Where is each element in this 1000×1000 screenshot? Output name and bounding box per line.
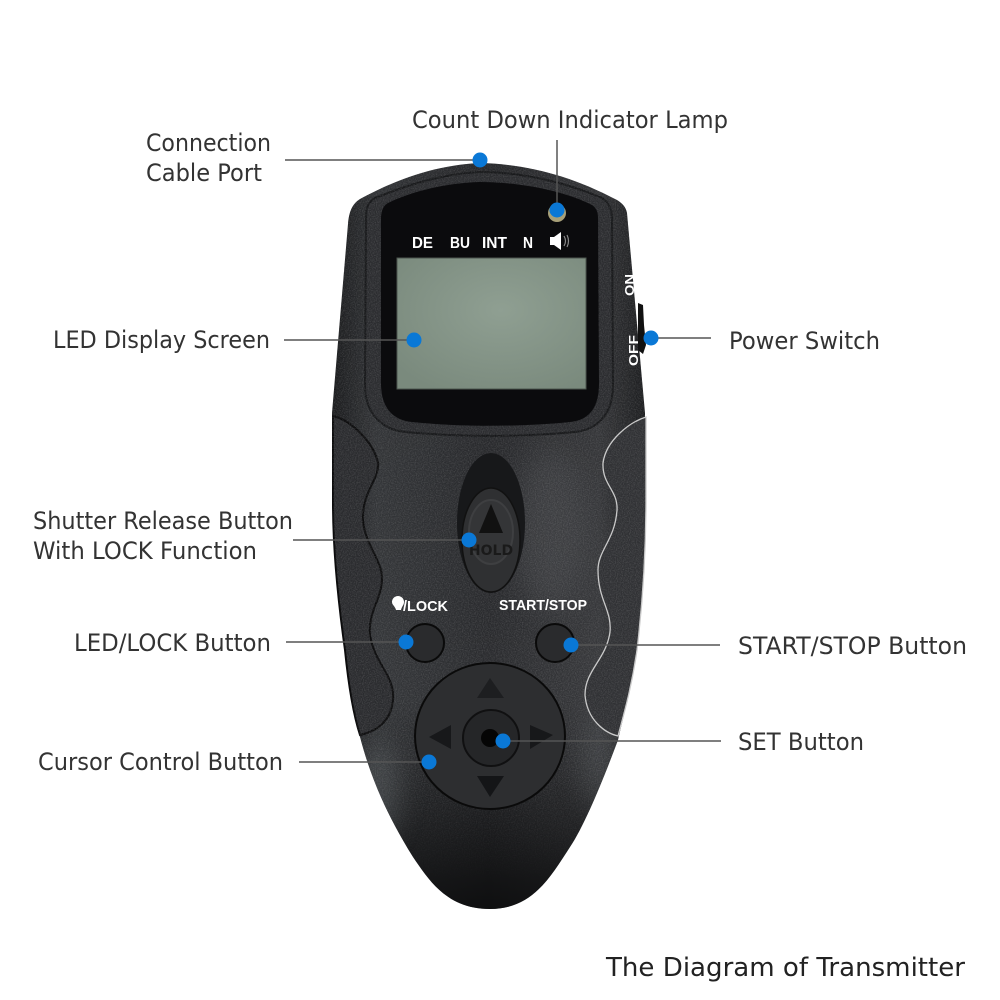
power switch	[638, 303, 646, 354]
callout: count down indicator lamp	[412, 106, 728, 218]
callout: LED/LOCK button: LED/LOCK Button	[74, 629, 271, 657]
shutter button	[457, 453, 525, 593]
callout: START/STOP button: START/STOP Button	[738, 632, 967, 660]
callout: cursor control button: Cursor Control Button	[38, 748, 283, 776]
callout: START/STOP button	[564, 632, 967, 660]
screen glass	[381, 182, 599, 426]
LCD display	[397, 258, 586, 389]
device: transmitter remote	[332, 163, 646, 909]
callout: connection cable port	[146, 129, 488, 187]
callout: shutter release button: Shutter Release Button	[33, 507, 293, 535]
callout: power switch	[644, 327, 880, 355]
callout: cursor control button	[38, 748, 436, 776]
callout: LED/LOCK button	[74, 629, 414, 657]
body highlights	[358, 450, 618, 840]
mode labels: DE	[412, 235, 433, 252]
switch labels: ON	[622, 274, 637, 296]
callout: count down indicator lamp: Count Down Indicator Lamp	[412, 106, 728, 134]
body grain texture	[332, 163, 646, 909]
device body	[332, 163, 646, 909]
callout: shutter release button	[33, 507, 476, 565]
icon: speaker	[550, 232, 568, 250]
mode labels	[412, 235, 533, 252]
mode labels: N	[523, 235, 533, 252]
START/STOP button	[536, 624, 574, 662]
callout: SET button: SET Button	[738, 728, 864, 756]
indicator lamp	[548, 204, 566, 222]
callout: LED display screen	[53, 326, 422, 354]
switch labels: OFF	[626, 335, 641, 366]
START/STOP label: START/STOP	[499, 597, 587, 614]
callout: SET button	[496, 728, 864, 756]
caption: The Diagram of Transmitter	[605, 953, 965, 983]
LED/LOCK button	[406, 624, 444, 662]
callout: connection cable port: Cable Port	[146, 159, 262, 187]
callout: shutter release button: With LOCK Function	[33, 537, 257, 565]
mode labels: INT	[482, 235, 507, 252]
callout: power switch: Power Switch	[729, 327, 880, 355]
screen bezel	[365, 172, 613, 436]
mode labels: BU	[450, 235, 470, 252]
shutter button: HOLD	[469, 543, 513, 559]
callout: connection cable port: Connection	[146, 129, 271, 157]
cursor pad	[415, 663, 565, 809]
LED/LOCK label: /LOCK	[403, 598, 448, 615]
left grip panel	[333, 416, 393, 735]
callout: LED display screen: LED Display Screen	[53, 326, 270, 354]
switch labels	[622, 274, 641, 366]
right grip panel	[585, 417, 646, 736]
